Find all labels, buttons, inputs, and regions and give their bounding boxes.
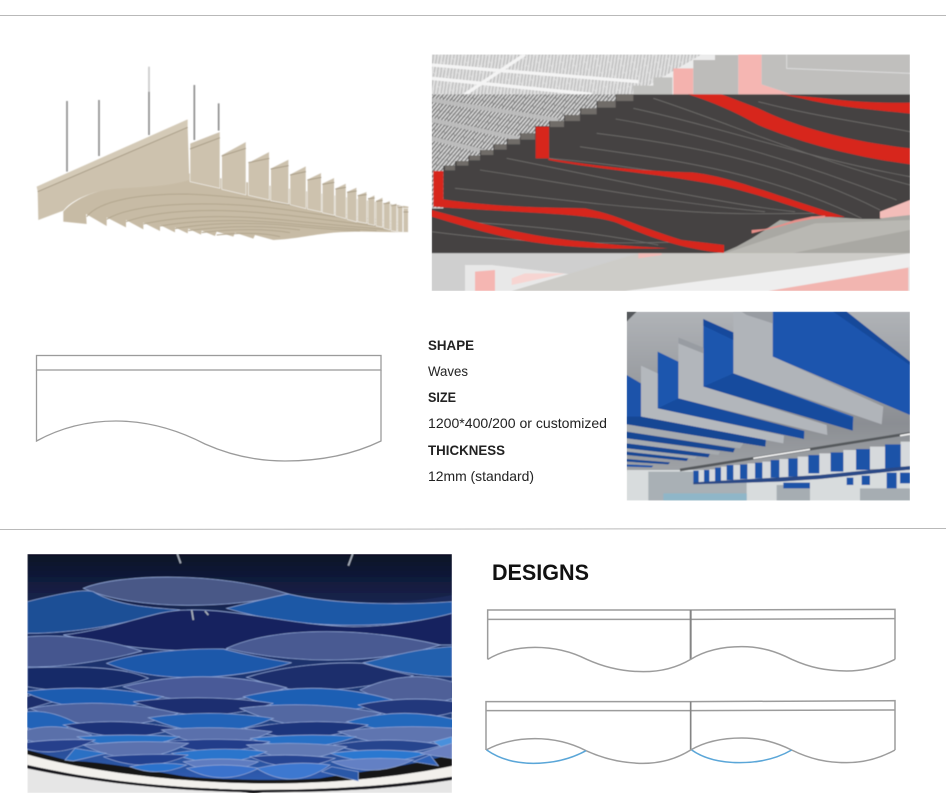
- truss inside central band: [432, 94, 635, 208]
- photo: blue and grey baffles in office: [627, 312, 910, 501]
- curved white trim: [27, 754, 452, 790]
- blue panel: [627, 375, 766, 447]
- big blue panel: [773, 312, 910, 415]
- washed upper panels: [633, 77, 672, 94]
- middle divider line: [0, 528, 946, 530]
- concrete beam: [712, 214, 910, 254]
- receding panels: [627, 424, 743, 448]
- label: size: SIZE: [428, 389, 456, 405]
- value: size: 1200*400/200 or customized: [428, 415, 607, 431]
- label: shape: SHAPE: [428, 337, 474, 353]
- value: waves: Waves: [428, 363, 468, 379]
- photo: grey and red wave baffles: [432, 54, 910, 291]
- grey panel: [641, 366, 784, 443]
- specification text block: [428, 337, 607, 484]
- drawing: single wave panel outline: [36, 356, 381, 461]
- heading: designs: DESIGNS: [492, 560, 589, 585]
- washed lower area: [432, 252, 712, 254]
- blue highlighted curves: [487, 750, 792, 763]
- wave lenses: [7, 577, 473, 781]
- front panel: [38, 127, 189, 220]
- washed ceiling background: [432, 54, 716, 209]
- blue panel: [703, 319, 853, 431]
- base blue fill behind lenses: [27, 620, 452, 780]
- value: thickness: 12mm (standard): [428, 468, 534, 484]
- label: thickness: THICKNESS: [428, 442, 505, 458]
- grey panel: [733, 312, 883, 424]
- suspension rods: [67, 67, 219, 172]
- red step slivers: [752, 216, 825, 233]
- repeating panels: [190, 132, 408, 232]
- seams between baffles: [432, 98, 910, 245]
- hanging wires and clips: [177, 554, 353, 620]
- wave underside with sawtooth slat edges: [63, 173, 408, 240]
- illustration: beige hanging wave baffles: [37, 67, 408, 240]
- drawing: two wave panels with blue highlighted curves: [486, 701, 895, 763]
- grey panel: [678, 337, 827, 435]
- baffle tops: [445, 94, 633, 170]
- ceiling light strip: [680, 433, 910, 470]
- red stripes: [432, 94, 910, 253]
- wall and dark ceiling: [27, 554, 452, 793]
- distant baffles row: [699, 442, 910, 483]
- photo: blue wave ceiling: [7, 554, 473, 793]
- drawing: two wave panels joined: [488, 609, 895, 672]
- ceiling and wall: [627, 312, 910, 472]
- dark felt baffles: [432, 94, 910, 253]
- blue panel: [658, 352, 804, 439]
- top divider line: [0, 15, 946, 16]
- panel ledges: [190, 138, 408, 212]
